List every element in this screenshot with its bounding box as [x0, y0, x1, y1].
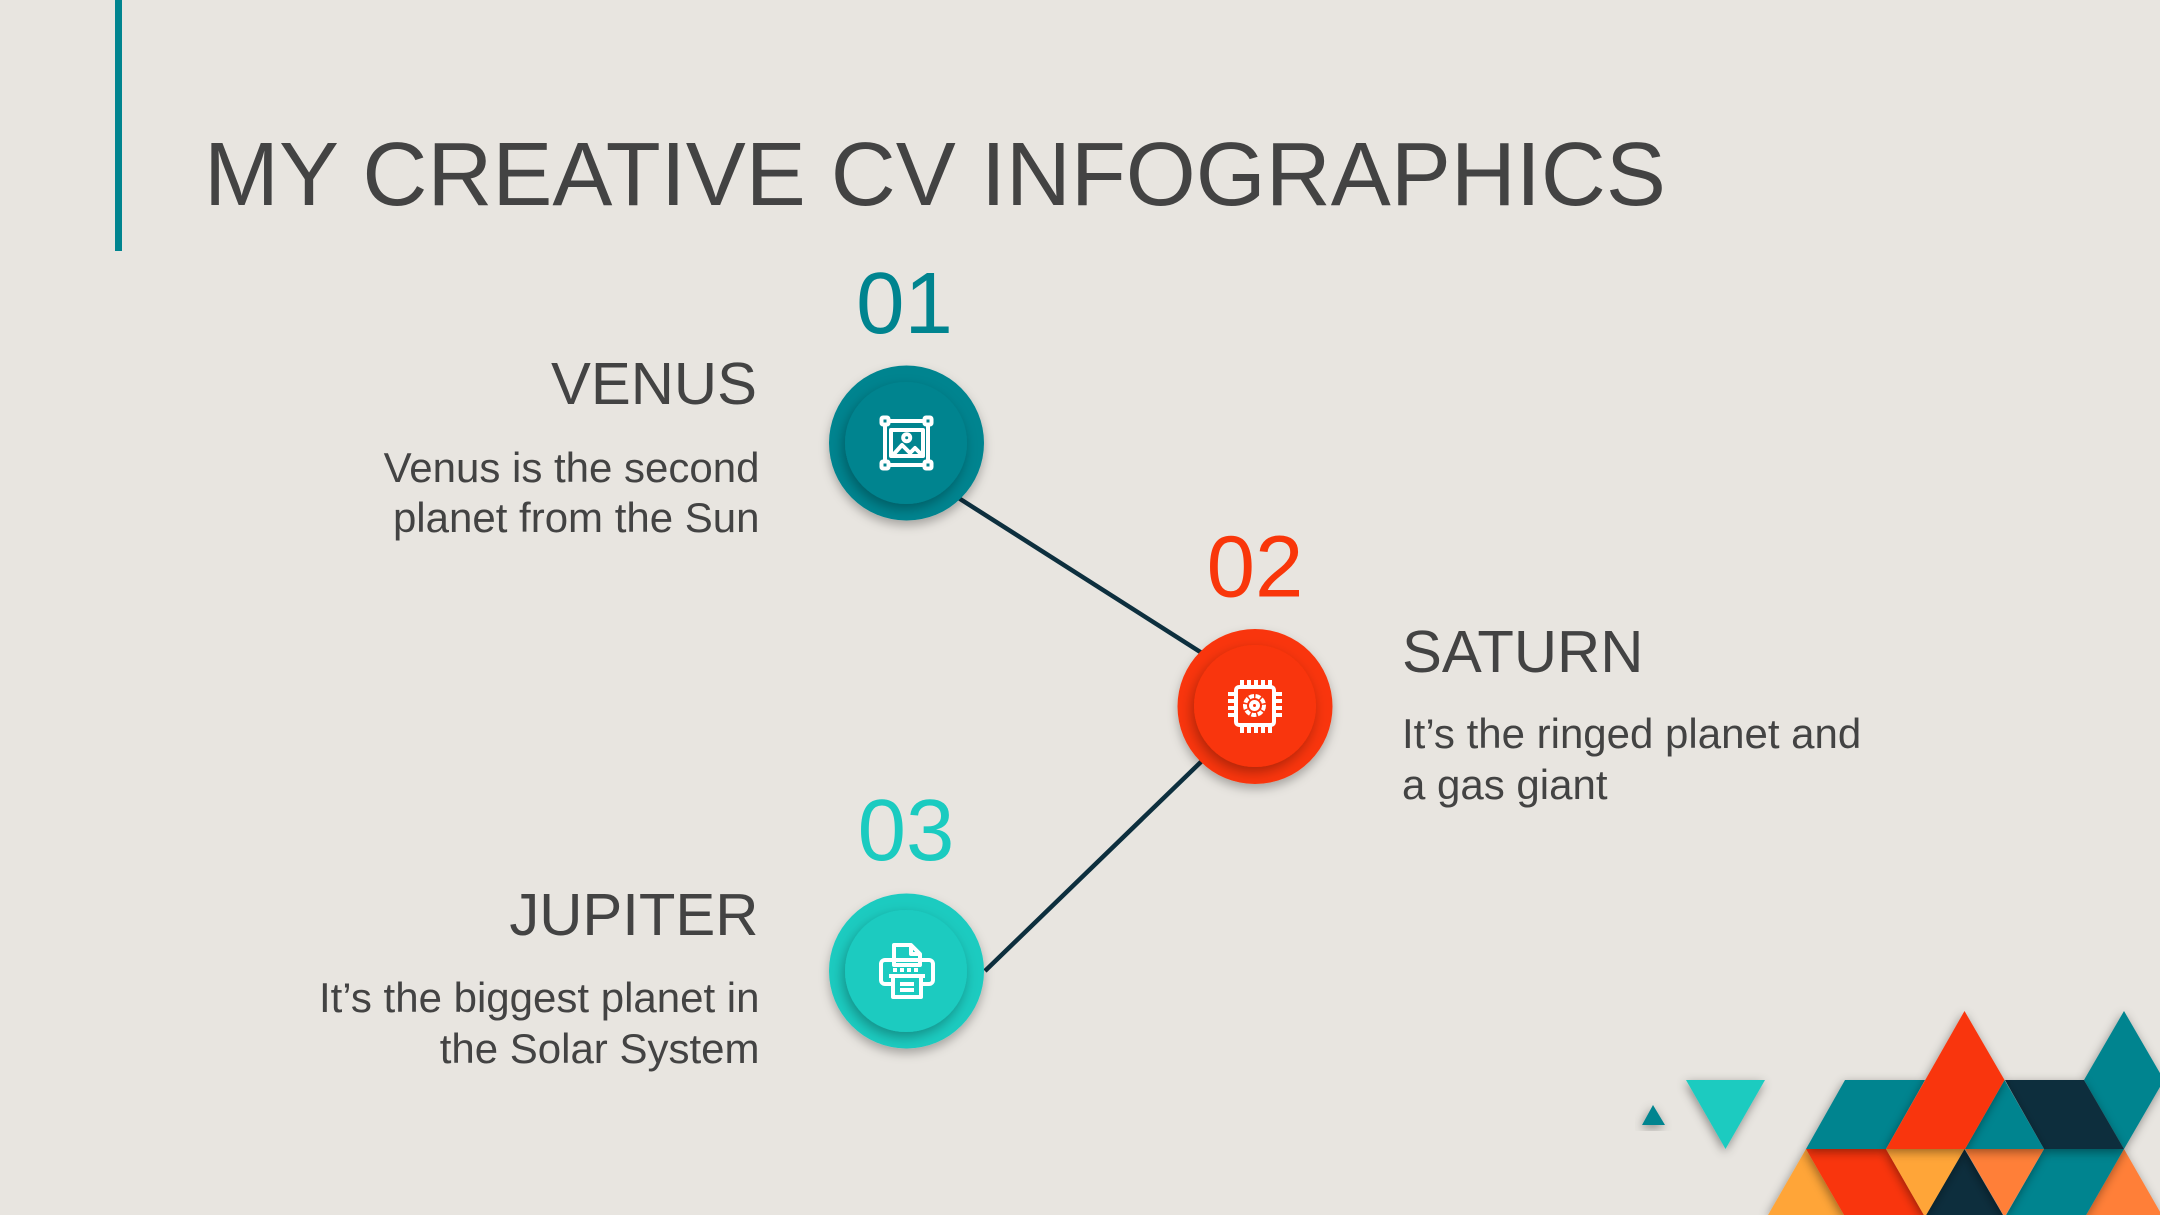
navy parallelogram	[2005, 1080, 2124, 1149]
teal parallelogram bottom	[2005, 1149, 2124, 1215]
accent bar	[115, 0, 122, 251]
description Jupiter: It’s the biggest planet in	[319, 974, 760, 1021]
inner circle 01	[845, 382, 967, 504]
circle badge 02	[1178, 629, 1332, 784]
yellow triangle bottom left	[1768, 1149, 1844, 1215]
red parallelogram top	[1886, 1011, 2004, 1149]
navy triangle bottom	[1926, 1149, 2003, 1215]
teal diamond	[2084, 1011, 2160, 1149]
description Venus: planet from the Sun	[393, 494, 760, 541]
number 02: 02	[1207, 518, 1303, 616]
number 03: 03	[858, 782, 954, 879]
circle badge 03	[829, 894, 984, 1048]
description Saturn: a gas giant	[1402, 761, 1608, 808]
teal small triangle	[1965, 1080, 2044, 1149]
item 03: Jupiter	[319, 782, 984, 1072]
orange inverted triangle	[1965, 1149, 2044, 1215]
cyan inverted triangle	[1686, 1080, 1765, 1149]
circle badge 01	[829, 366, 984, 520]
title: MY CREATIVE CV INFOGRAPHICS	[204, 125, 1666, 225]
item 01: Venus	[384, 255, 984, 541]
small teal triangle	[1642, 1105, 1665, 1125]
connector lines	[957, 497, 1205, 971]
inner circle 03	[845, 910, 967, 1032]
item 02: Saturn	[1178, 518, 1861, 808]
icon: processor chip	[1228, 680, 1282, 733]
inner circle 02	[1194, 645, 1316, 767]
heading Jupiter: JUPITER	[509, 881, 758, 948]
description Saturn: It’s the ringed planet and	[1402, 710, 1861, 757]
description Jupiter: the Solar System	[440, 1025, 760, 1072]
orange triangle right	[2085, 1149, 2160, 1215]
decorative triangle pattern	[1642, 1011, 2160, 1215]
number 01: 01	[856, 255, 953, 352]
heading Venus: VENUS	[551, 350, 757, 417]
teal parallelogram top	[1806, 1080, 1925, 1149]
description Venus: Venus is the second	[384, 444, 760, 491]
yellow inverted triangle	[1886, 1149, 1964, 1215]
red parallelogram bottom	[1806, 1149, 1924, 1215]
icon: printer	[881, 945, 933, 997]
heading Saturn: SATURN	[1402, 618, 1643, 685]
icon: image frame	[882, 418, 932, 468]
